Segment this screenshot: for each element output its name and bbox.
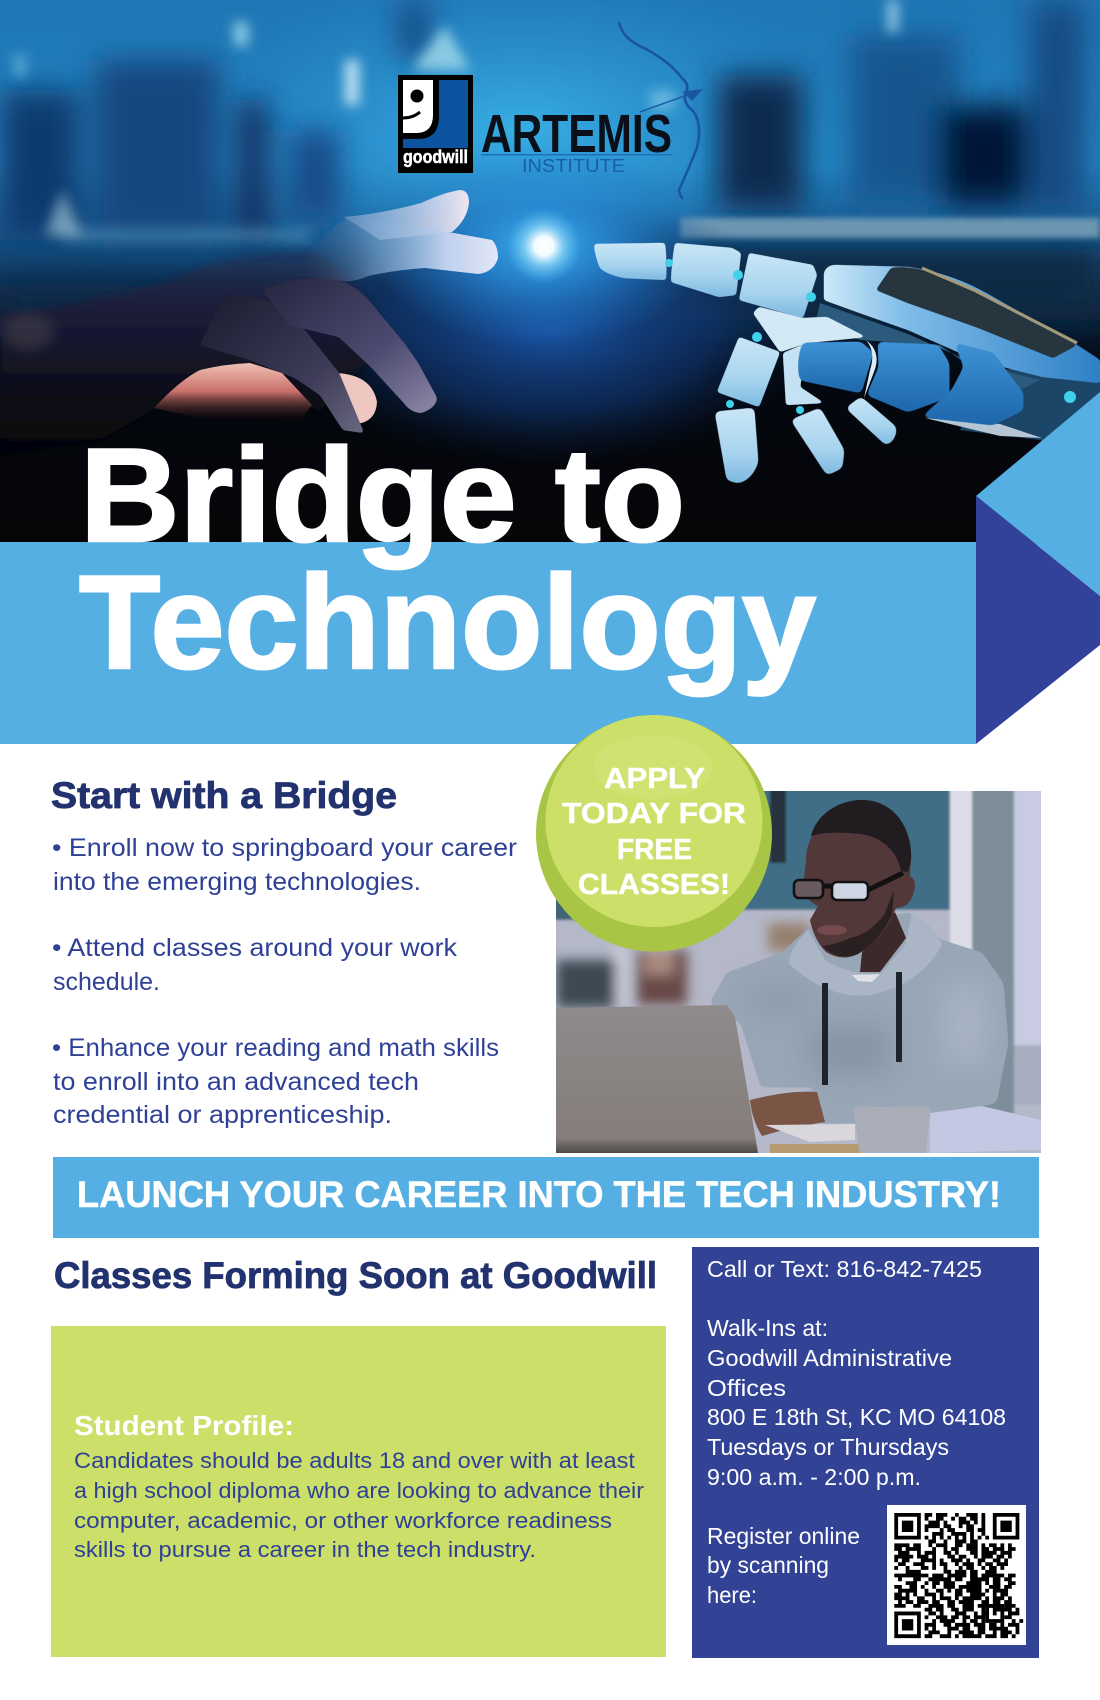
blurred city skyline background (0, 0, 1100, 545)
arrow (640, 90, 701, 112)
central dark blue glow (351, 212, 785, 453)
panel: student profile (51, 1326, 666, 1657)
INSTITUTE: INSTITUTE (522, 156, 625, 176)
panel paragraph: skills to pursue a career in the tech industry. (74, 1537, 536, 1562)
glasses (794, 873, 903, 900)
back-of-hand blue shell (824, 265, 1100, 383)
eye (410, 90, 424, 102)
wrist mechanics (960, 369, 1100, 441)
panel: contact (692, 1247, 1039, 1658)
hand (750, 1092, 825, 1136)
curled finger (200, 295, 364, 433)
panel background (51, 1326, 666, 1657)
bullet two: schedule. (53, 968, 160, 996)
bullet one: into the emerging technologies. (53, 868, 421, 896)
bullet two: • Attend classes around your work (52, 934, 458, 962)
blue finger one (799, 342, 873, 393)
hoodie shading (750, 985, 985, 1075)
badge text line three: FREE (617, 834, 692, 866)
neck (860, 912, 906, 972)
black frame (398, 75, 473, 173)
title line one: Bridge to (80, 422, 685, 570)
banner background (53, 1157, 1039, 1238)
walk-in details: 9:00 a.m. - 2:00 p.m. (707, 1464, 921, 1490)
coffee cup (853, 1107, 930, 1153)
upper fingertip (344, 190, 469, 240)
thumb tip (337, 373, 377, 424)
table (770, 1144, 880, 1153)
smile (403, 112, 420, 118)
open book (930, 1106, 1041, 1153)
launch banner (53, 1157, 1039, 1238)
bullet one: • Enroll now to springboard your career (52, 834, 517, 862)
walk-in details: Tuesdays or Thursdays (707, 1434, 949, 1460)
wrist and back of hand (0, 250, 374, 441)
register text: Register online (707, 1523, 860, 1549)
banner bar (0, 542, 976, 744)
smiling g mark (403, 80, 433, 133)
fingertip segment (594, 243, 666, 280)
room background (550, 785, 1050, 1160)
walk-in details: Offices (707, 1375, 786, 1401)
beard (822, 890, 894, 957)
smiling g mark outline (403, 80, 439, 139)
pale palm (753, 307, 866, 352)
photo: student at laptop (550, 785, 1050, 1160)
badge face (546, 715, 762, 927)
hoodie (710, 913, 1008, 1123)
head (803, 800, 915, 958)
blue finger two (867, 342, 949, 412)
pink palm (154, 363, 312, 420)
wrist highlight (2, 314, 54, 350)
bullet two (52, 934, 458, 996)
walk-in details (707, 1315, 1006, 1490)
badge text line two: TODAY FOR (562, 798, 746, 830)
robot hand (594, 243, 1100, 483)
middle finger upper (783, 343, 824, 405)
middle segment (671, 243, 741, 297)
bullet three (52, 1034, 499, 1129)
hair (811, 800, 911, 872)
bow (619, 22, 699, 199)
panel paragraph: a high school diploma who are looking to advance their (74, 1478, 644, 1503)
left finger lower (715, 408, 758, 483)
ARTEMIS wordmark: ARTEMIS (481, 104, 672, 164)
left finger upper (717, 337, 780, 407)
blue wrist shell (922, 343, 1023, 425)
pointing finger (314, 217, 498, 282)
laptop (556, 1005, 758, 1153)
heading: Start with a Bridge (51, 775, 397, 816)
human hand (0, 190, 498, 455)
bullet three: to enroll into an advanced tech (53, 1068, 419, 1096)
logo: Artemis Institute (481, 22, 701, 199)
cyan joints (665, 259, 1076, 414)
register text: by scanning (707, 1552, 829, 1578)
white finger ring (864, 340, 877, 398)
blue light around the fingertip gap (389, 164, 698, 334)
back finger (846, 397, 896, 445)
goodwill wordmark: goodwill (403, 147, 468, 167)
bullet one (52, 834, 517, 896)
register text: here: (707, 1582, 757, 1608)
call or text: Call or Text: 816-842-7425 (707, 1256, 982, 1282)
QR code (887, 1505, 1026, 1645)
arrow shape dark (976, 496, 1100, 744)
hood collar (789, 913, 942, 996)
badge text line four: CLASSES! (578, 869, 730, 901)
arrow shape light (976, 392, 1100, 596)
bullet three: credential or apprenticeship. (53, 1101, 392, 1129)
walk-in details: Goodwill Administrative (707, 1345, 952, 1371)
internal mechanism (815, 303, 1040, 395)
gold plate edge (922, 268, 1077, 343)
white undershirt (852, 974, 880, 982)
badge highlight (594, 735, 712, 799)
lower extended finger (262, 278, 437, 413)
spark of light between fingers (510, 212, 578, 281)
hero photo: human and robot hands (0, 0, 1100, 545)
register text (707, 1523, 860, 1608)
lips (817, 925, 847, 935)
notebook (765, 1124, 855, 1142)
blue field (403, 80, 468, 148)
drawstrings (825, 972, 899, 1085)
logo: Goodwill (398, 75, 473, 173)
base segment (739, 253, 817, 318)
panel paragraph: Candidates should be adults 18 and over with at least (74, 1448, 635, 1473)
silver wrist band (925, 418, 1042, 438)
title line two: Technology (79, 549, 816, 697)
apply today badge (536, 715, 772, 952)
glass plate (876, 267, 1077, 358)
bullet three: • Enhance your reading and math skills (52, 1034, 499, 1062)
middle finger lower (791, 408, 844, 475)
badge rim (536, 716, 772, 952)
panel heading: Student Profile: (74, 1410, 294, 1441)
banner text: LAUNCH YOUR CAREER INTO THE TECH INDUSTRY! (77, 1174, 1001, 1215)
panel paragraph: computer, academic, or other workforce readiness (74, 1508, 612, 1533)
panel paragraph (74, 1448, 644, 1562)
section: start with a bridge (51, 775, 517, 1129)
walk-in details: Walk-Ins at: (707, 1315, 828, 1341)
underline (481, 154, 672, 155)
heading: classes forming soon: Classes Forming Soon at Goodwill (54, 1255, 657, 1296)
badge text line one: APPLY (604, 763, 705, 795)
contact background (692, 1247, 1039, 1658)
title (79, 422, 816, 697)
walk-in details: 800 E 18th St, KC MO 64108 (707, 1404, 1006, 1430)
